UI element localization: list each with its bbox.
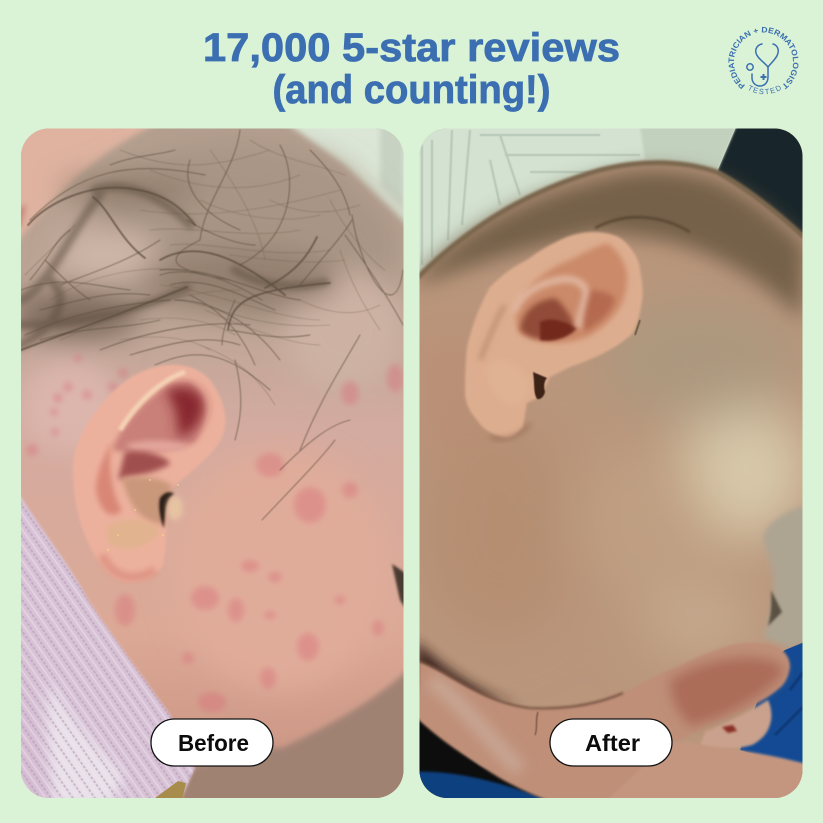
finger tip under thumb: [700, 700, 771, 749]
photo background: skin: [21, 128, 404, 798]
label pill: After: [550, 719, 672, 766]
title: [203, 26, 620, 112]
photo background: skin: [419, 128, 803, 798]
nose fold: [762, 506, 802, 648]
hand at top left: [21, 128, 152, 240]
ear: [73, 365, 225, 582]
panel: before photo: [10, 120, 410, 805]
hand and thumb: [419, 643, 790, 805]
dark background top right: [718, 128, 802, 234]
label pill: After: After: [585, 730, 640, 756]
shadow beneath jaw: [415, 640, 520, 705]
badge: pediatrician + dermatologist tested: PEDIATRICIAN + DERMATOLOGIST: [728, 26, 798, 90]
cloth behind head: [289, 128, 404, 225]
knit garment: [15, 490, 195, 805]
badge: pediatrician + dermatologist tested: TESTED: [749, 84, 781, 94]
title: 17,000 5-star reviews: [203, 26, 620, 70]
hair strands: [21, 130, 403, 520]
scalp tones: [10, 143, 405, 690]
shadow at cheek edge: [390, 563, 404, 608]
panel: after photo: [410, 125, 810, 805]
striped cloth: [415, 125, 737, 280]
title: (and counting!): [272, 68, 550, 112]
ear: [465, 232, 643, 439]
neck below jaw: [182, 670, 404, 798]
garment button: [155, 781, 186, 798]
fingers along the bottom: [612, 742, 802, 798]
label pill: Before: Before: [178, 730, 249, 756]
blue fabric: [740, 640, 805, 770]
head skin and hair: [415, 163, 805, 805]
label pill: Before: [151, 719, 273, 766]
rash spots: [26, 354, 403, 712]
